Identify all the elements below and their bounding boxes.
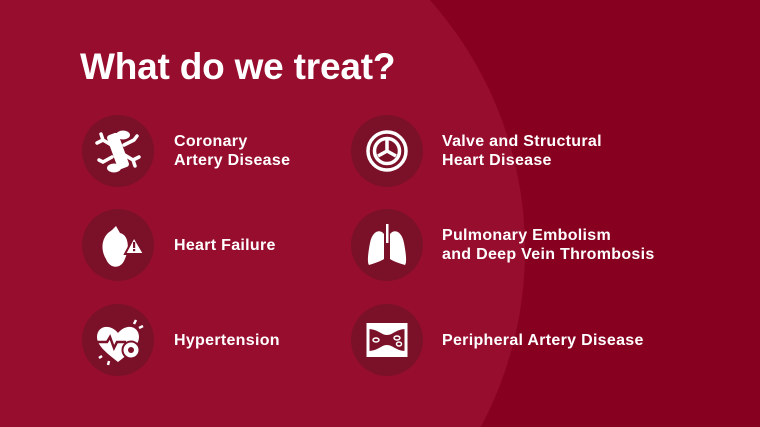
icon: peripheral artery — [351, 304, 423, 376]
icon: coronary artery — [82, 115, 154, 187]
title: What do we treat? — [80, 46, 395, 87]
text: coronary: Artery Disease — [174, 152, 290, 169]
text: pulmonary: and Deep Vein Thrombosis — [442, 246, 655, 263]
icon: lungs — [351, 209, 423, 281]
text: valve: Heart Disease — [442, 152, 552, 169]
icon: valve — [351, 115, 423, 187]
text: coronary — [174, 133, 290, 169]
text: pulmonary — [442, 227, 655, 263]
text: valve: Valve and Structural — [442, 133, 602, 150]
text: hypertension: Hypertension — [174, 332, 280, 349]
icon: hypertension — [82, 304, 154, 376]
text: pulmonary: Pulmonary Embolism — [442, 227, 611, 244]
text: heart failure: Heart Failure — [174, 237, 276, 254]
text: valve — [442, 133, 602, 169]
icon: heart failure — [82, 209, 154, 281]
text: coronary: Coronary — [174, 133, 248, 150]
text: peripheral: Peripheral Artery Disease — [442, 332, 644, 349]
